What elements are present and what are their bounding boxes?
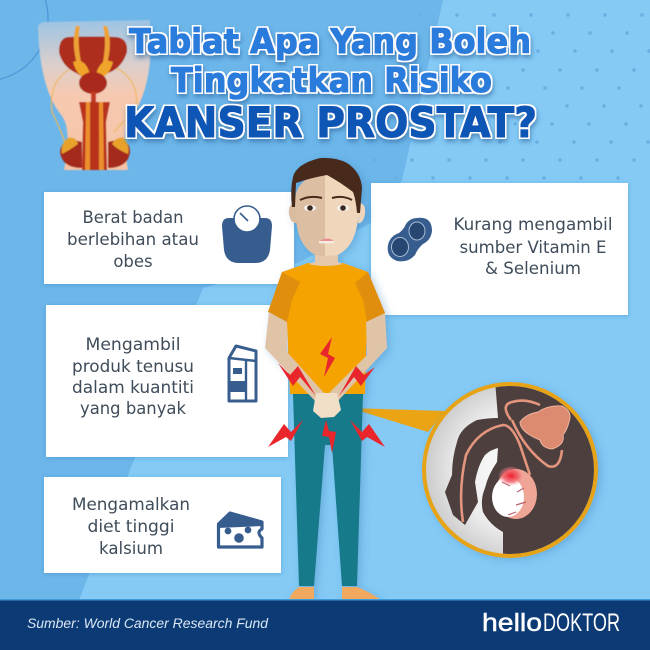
ears — [289, 203, 297, 223]
icon: cheese — [218, 512, 262, 547]
mouth — [319, 238, 334, 243]
text: high calcium diet: diet tinggi — [88, 517, 174, 536]
text: dairy products: dalam kuantiti — [72, 378, 194, 397]
callout pointer — [350, 408, 445, 432]
legs — [293, 394, 363, 586]
panel: vitamin E and selenium — [371, 183, 628, 315]
title line 1: Tabiat Apa Yang Boleh — [129, 22, 531, 62]
title line 3: KANSER PROSTAT? — [124, 98, 537, 147]
title — [124, 22, 537, 147]
text: vitamin E and selenium: sumber Vitamin E — [460, 238, 606, 257]
text: overweight: obes — [113, 252, 153, 271]
text: high calcium diet: Mengamalkan — [72, 495, 190, 514]
eyes — [304, 205, 349, 211]
eyebrows — [300, 197, 352, 200]
illustration: man — [265, 158, 387, 600]
shirt sleeves — [268, 272, 385, 323]
text: vitamin E and selenium: Kurang mengambil — [454, 215, 612, 234]
icon: peanut — [388, 218, 432, 261]
text: overweight: Berat badan — [82, 208, 184, 227]
shirt — [268, 263, 385, 394]
footer bar — [0, 599, 650, 650]
panel: overweight — [44, 192, 294, 284]
arms — [265, 312, 387, 402]
panel: high calcium diet — [44, 477, 281, 573]
hands — [313, 393, 341, 418]
collar and neck — [308, 250, 343, 266]
hair — [291, 158, 362, 213]
text: high calcium diet: kalsium — [99, 539, 163, 558]
text: dairy products: produk tenusu — [72, 357, 194, 376]
icon: milk carton — [229, 346, 256, 401]
logo — [482, 609, 620, 637]
illustration: prostate anatomy — [38, 20, 150, 170]
text: dairy products: yang banyak — [80, 399, 186, 418]
pain bolts — [268, 337, 385, 453]
icon: weighing scale — [222, 206, 272, 263]
shoes — [289, 587, 381, 600]
logo: DOKTOR — [543, 609, 620, 637]
panel: dairy products — [46, 305, 288, 457]
logo: hello — [482, 609, 542, 637]
text: vitamin E and selenium: & Selenium — [485, 259, 581, 278]
callout: magnified prostate — [350, 380, 600, 560]
source credit: Sumber: World Cancer Research Fund — [27, 616, 269, 631]
face — [295, 172, 325, 256]
title line 2: Tingkatkan Risiko — [171, 61, 492, 101]
text: dairy products: Mengambil — [86, 335, 180, 354]
text: overweight: berlebihan atau — [67, 230, 199, 249]
